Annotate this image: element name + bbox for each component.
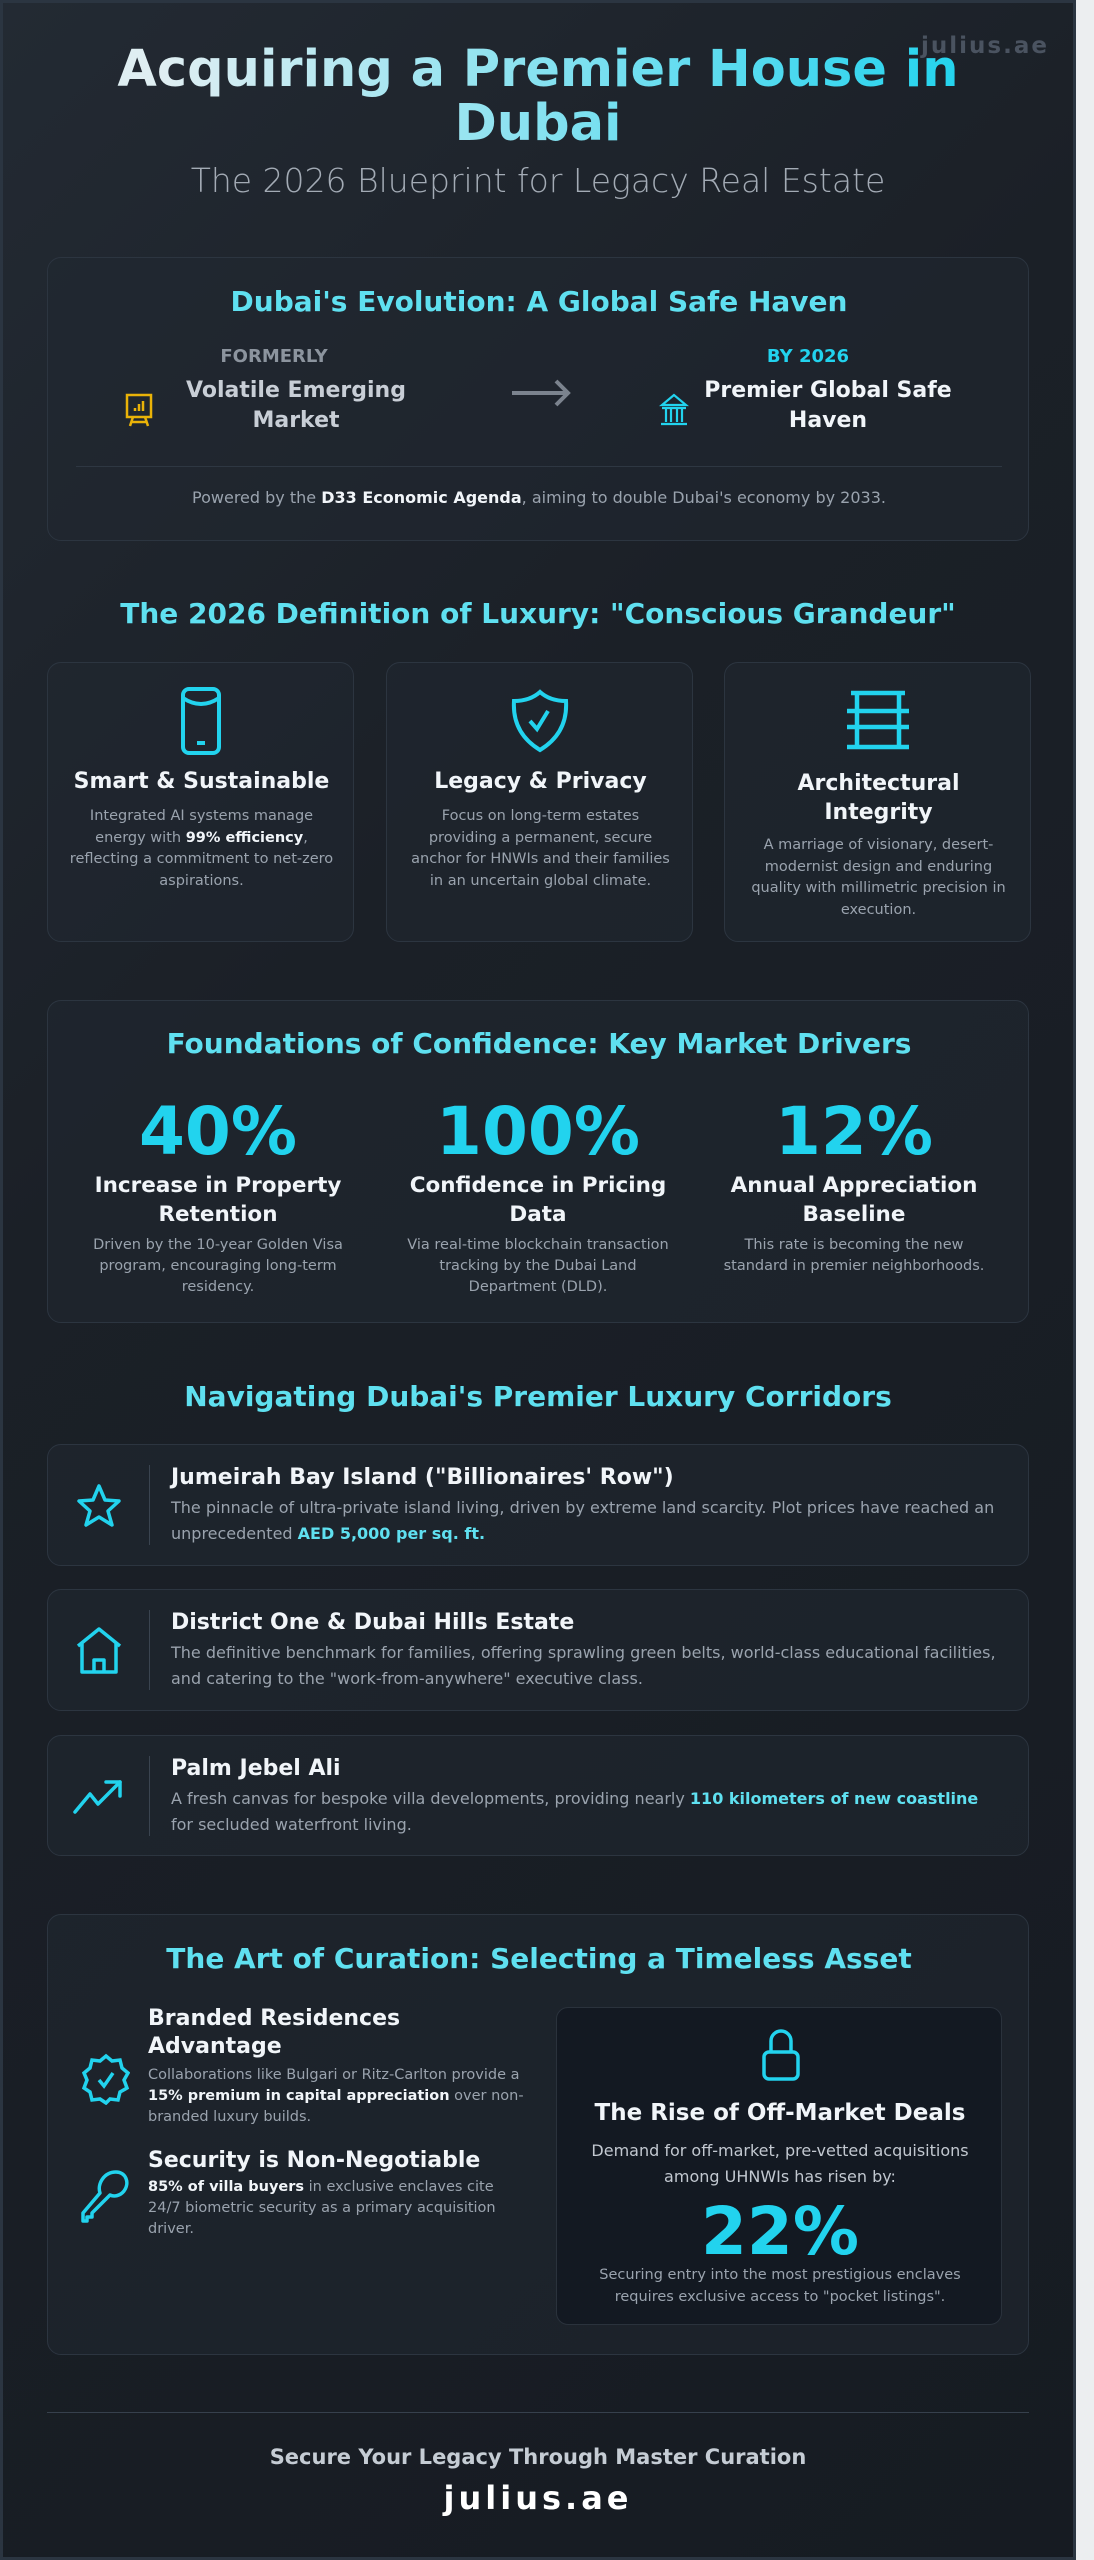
heading: luxury: The 2026 Definition of Luxury: "Conscious Grandeur" <box>120 597 956 630</box>
stat: 12%: Annual Appreciation Baseline <box>731 1173 977 1227</box>
callout: off-market deals: 22% <box>701 2193 859 2270</box>
corridor title: Jumeirah Bay Island ("Billionaires' Row") <box>171 1465 674 1490</box>
card text: Focus on long-term estates providing a permanent, secure anchor for HNWIs and their families in an uncertain global climate. <box>411 808 670 888</box>
footer <box>47 2412 1029 2532</box>
watermark: julius.ae <box>921 33 1049 59</box>
formerly block: Volatile Emerging Market <box>186 378 406 433</box>
stat: 12%: 12% <box>775 1093 933 1170</box>
panel: key market drivers <box>47 1000 1029 1323</box>
card title: Smart & Sustainable <box>74 769 329 794</box>
icon: phone <box>181 687 221 755</box>
title: Dubai <box>454 94 622 153</box>
footnote: D33: Powered by the D33 Economic Agenda, aiming to double Dubai's economy by 2033. <box>192 488 886 507</box>
stat: 40%: Driven by the 10-year Golden Visa program, encouraging long-term residency. <box>93 1237 343 1295</box>
icon: key <box>81 2170 129 2223</box>
card title: Legacy & Privacy <box>434 769 647 794</box>
stat: 100% <box>407 1093 669 1295</box>
corridor: district one <box>47 1589 1029 1711</box>
corridor text: The pinnacle of ultra-private island living, driven by extreme land scarcity. Plot prices have reached an unprecedented AED 5,000 per sq. ft. <box>171 1498 994 1543</box>
icon: chart board <box>126 394 152 426</box>
stat: 12% <box>724 1093 984 1274</box>
callout: off-market deals: The Rise of Off-Market Deals <box>595 2100 965 2126</box>
by 2026 block <box>659 346 952 433</box>
card text: A marriage of visionary, desert-modernist design and enduring quality with millimetric precision in execution. <box>751 837 1006 918</box>
card text: Integrated AI systems manage energy with 99% efficiency, reflecting a commitment to net-zero aspirations. <box>70 808 333 888</box>
panel: evolution <box>47 257 1029 541</box>
item: security: Security is Non-Negotiable <box>148 2148 480 2173</box>
stat: 12%: This rate is becoming the new <box>744 1237 964 1253</box>
card title <box>797 771 960 825</box>
arrow <box>512 380 571 406</box>
icon: shield <box>512 689 568 752</box>
footer tagline: Secure Your Legacy Through Master Curation <box>270 2445 806 2469</box>
item: branded residences <box>82 2006 524 2125</box>
stat: 40%: 40% <box>139 1093 297 1170</box>
stat: 100%: Via real-time blockchain transaction tracking by the Dubai Land Department (DLD). <box>407 1237 669 1295</box>
card title: Architectural <box>797 771 960 796</box>
by 2026 block: Premier Global Safe Haven <box>704 378 952 433</box>
corridor text: The definitive benchmark for families, offering sprawling green belts, world-class educational facilities, and catering to the "work-from-anywhere" executive class. <box>171 1643 996 1688</box>
panel: curation <box>47 1914 1029 2355</box>
stat: 12%: standard in premier neighborhoods. <box>724 1258 984 1274</box>
corridor title: Palm Jebel Ali <box>171 1756 341 1781</box>
callout: off-market deals: Securing entry into the most prestigious enclaves requires exclusive access to "pocket listings". <box>599 2267 961 2305</box>
icon: lock <box>762 2029 800 2081</box>
callout: off-market deals: Demand for off-market, pre-vetted acquisitions among UHNWIs has risen by: <box>591 2141 969 2186</box>
stat: 100%: Confidence in Pricing Data <box>410 1173 666 1227</box>
corridor title: District One & Dubai Hills Estate <box>171 1610 574 1635</box>
stat: 40% <box>93 1093 343 1295</box>
item: branded residences: Collaborations like Bulgari or Ritz-Carlton provide a 15% premium in capital appreciation over non-branded luxury builds. <box>148 2067 524 2125</box>
callout: off-market deals <box>556 2007 1002 2325</box>
title <box>3 43 1073 151</box>
icon: star <box>77 1484 121 1527</box>
corridor: jumeirah bay <box>47 1444 1029 1566</box>
heading: curation: The Art of Curation: Selecting a Timeless Asset <box>166 1942 912 1975</box>
icon: badge check <box>82 2054 130 2105</box>
icon: house <box>77 1627 121 1674</box>
panel: architectural integrity <box>724 662 1031 942</box>
corridor: palm jebel ali <box>47 1735 1029 1856</box>
heading: evolution: Dubai's Evolution: A Global Safe Haven <box>231 285 847 318</box>
item: security <box>81 2148 496 2237</box>
corridor text: A fresh canvas for bespoke villa developments, providing nearly 110 kilometers of new coastline for secluded waterfront living. <box>171 1789 978 1834</box>
stat: 100%: 100% <box>436 1093 640 1170</box>
footer brand: julius.ae <box>444 2479 632 2517</box>
panel: smart & sustainable <box>47 662 354 942</box>
card title: Integrity <box>824 800 933 825</box>
item: branded residences: Branded Residences Advantage <box>148 2006 400 2059</box>
title: Acquiring a Premier House in <box>117 40 959 99</box>
stat: 40%: Increase in Property Retention <box>95 1173 341 1227</box>
formerly block <box>126 346 406 433</box>
item: security: 85% of villa buyers in exclusive enclaves cite 24/7 biometric security as a primary acquisition driver. <box>148 2179 496 2237</box>
heading: corridors: Navigating Dubai's Premier Luxury Corridors <box>184 1380 892 1413</box>
heading: drivers: Foundations of Confidence: Key Market Drivers <box>167 1027 911 1060</box>
by 2026 block: BY 2026 <box>767 346 849 367</box>
icon: trend arrow <box>73 1780 122 1814</box>
subtitle: The 2026 Blueprint for Legacy Real Estate <box>191 161 885 200</box>
formerly block: FORMERLY <box>220 346 328 367</box>
icon: bank <box>659 394 689 426</box>
panel: legacy & privacy <box>386 662 693 942</box>
icon: building frame <box>847 690 909 750</box>
